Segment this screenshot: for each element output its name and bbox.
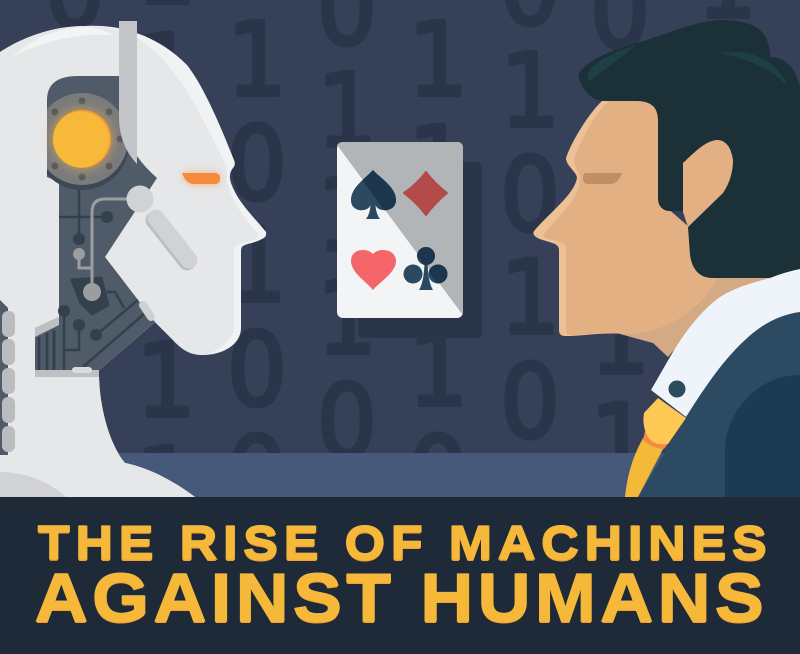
tie knot bbox=[643, 398, 686, 444]
background binary digits: 0 bbox=[227, 106, 287, 224]
gear with core bbox=[47, 93, 128, 190]
cheek bar bbox=[154, 218, 189, 262]
background binary digits: 0 bbox=[317, 364, 377, 482]
background binary digits: 0 bbox=[227, 312, 287, 430]
hair highlights bbox=[587, 45, 788, 87]
suit bbox=[638, 312, 800, 497]
background binary digits: 1 bbox=[500, 33, 560, 151]
robot eye bbox=[182, 173, 220, 184]
human bbox=[533, 20, 800, 497]
background binary digits: 1 bbox=[136, 323, 196, 441]
robot bbox=[0, 21, 266, 497]
small wire bbox=[79, 254, 92, 268]
floor bbox=[0, 453, 800, 497]
collar button bbox=[668, 380, 686, 398]
yellow core bbox=[53, 110, 111, 168]
yellow core face bbox=[53, 112, 109, 168]
circuit chip bbox=[72, 278, 108, 314]
background binary digits: 1 bbox=[136, 14, 196, 132]
open mechanical panel bbox=[35, 76, 157, 370]
background binary digits: 1 bbox=[317, 157, 377, 275]
card shadow bbox=[358, 162, 482, 338]
background binary digits: 1 bbox=[408, 106, 468, 224]
background binary digits bbox=[50, 0, 750, 453]
neck shadow bbox=[620, 278, 770, 357]
core glow bbox=[51, 108, 113, 170]
eye glow bbox=[182, 173, 220, 184]
neck bar pill bbox=[72, 367, 92, 373]
background binary digits: 1 bbox=[227, 208, 287, 326]
circuit traces bbox=[39, 185, 145, 370]
hair bbox=[578, 20, 800, 278]
icon: club bbox=[404, 247, 448, 290]
background binary digits: 0 bbox=[500, 137, 560, 255]
collar bbox=[651, 269, 800, 417]
suit shade bbox=[725, 375, 800, 497]
ear bbox=[683, 140, 733, 227]
head highlight bbox=[12, 27, 113, 57]
neck slab bbox=[35, 317, 59, 337]
background binary digits: 1 bbox=[590, 280, 650, 398]
tie lower bbox=[625, 438, 663, 497]
jaw joint bbox=[126, 186, 154, 212]
neck bar bbox=[35, 370, 99, 377]
background binary digits: 0 bbox=[500, 344, 560, 462]
gray wire bbox=[92, 199, 127, 292]
title line 1: THE RISE OF MACHINES bbox=[38, 516, 773, 569]
shoulder bbox=[0, 472, 66, 497]
robot silhouette bbox=[0, 26, 266, 497]
playing card bbox=[337, 142, 463, 318]
icon: spade bbox=[351, 170, 396, 219]
background binary digits: 0 bbox=[227, 416, 287, 534]
icon: heart bbox=[351, 250, 396, 290]
background binary digits: 1 bbox=[408, 2, 468, 120]
background binary digits: 1 bbox=[500, 240, 560, 358]
title banner bbox=[0, 497, 800, 654]
face inner bbox=[543, 101, 718, 335]
eye bbox=[583, 173, 622, 184]
background binary digits: 1 bbox=[317, 260, 377, 378]
icon: diamond bbox=[404, 172, 447, 215]
background binary digits: 1 bbox=[408, 312, 468, 430]
circuit nodes bbox=[58, 211, 113, 341]
face bbox=[533, 101, 718, 336]
background binary digits: 1 bbox=[136, 427, 196, 545]
background binary digits: 1 bbox=[590, 384, 650, 502]
jaw bolt bbox=[143, 305, 151, 317]
title line 2: AGAINST HUMANS bbox=[35, 561, 768, 636]
robot head fill bbox=[0, 26, 258, 497]
neck pills panel bbox=[0, 300, 15, 455]
background binary digits: 1 bbox=[227, 2, 287, 120]
illustration scene bbox=[0, 0, 800, 497]
gray headband bbox=[119, 21, 137, 164]
tie band bbox=[643, 431, 670, 449]
background binary digits: 0 bbox=[408, 416, 468, 534]
background binary digits: 1 bbox=[317, 53, 377, 171]
wire nodes bbox=[73, 248, 101, 301]
